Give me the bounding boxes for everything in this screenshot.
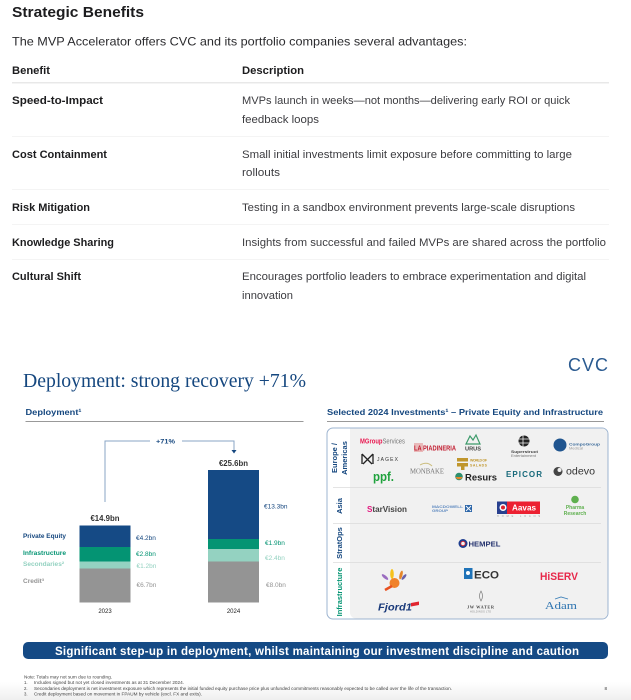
logo: La Piadineria (414, 443, 456, 452)
heading: deployment: Deployment¹ (26, 407, 82, 417)
logo: Pharma Research (564, 496, 586, 517)
logo: Superstruct Entertainment: Entertainment (511, 454, 536, 458)
row: cost containment (12, 149, 572, 179)
logo: Hempel: HEMPEL (468, 540, 501, 548)
row: cost containment: Cost Containment (12, 149, 107, 161)
logo: Pharma Research: Research (564, 511, 586, 517)
footnotes: 2. (24, 686, 28, 691)
logo: CVC: CVC (568, 355, 608, 375)
logo: Superstruct Entertainment (511, 436, 539, 458)
row: cultural shift: innovation (242, 290, 293, 302)
logo: PPF: ppf. (373, 469, 394, 484)
logo: Aavas: Aavas (512, 504, 537, 512)
row: cost containment: rollouts (242, 167, 281, 179)
logo: Monbake (410, 463, 444, 476)
value labels: €8.0bn (266, 582, 286, 589)
banner: key message (23, 642, 608, 659)
logo: CompoGroup Medical: Medical (569, 446, 583, 450)
legend labels: Infrastructure (23, 551, 67, 557)
value labels: €1.2bn (136, 563, 157, 570)
logo: Resurs: Resurs (465, 472, 497, 482)
intro text: The MVP Accelerator offers CVC and its portfolio companies several advantages: (12, 34, 467, 48)
logo: World of Salads (457, 458, 488, 470)
logo: World of Salads: WORLD OF (470, 458, 488, 462)
value labels: €2.4bn (265, 555, 285, 562)
logo: JW Water: HOLDINGS LTD (470, 610, 491, 614)
row: risk mitigation: Testing in a sandbox environment prevents large-scale disruptions (242, 202, 576, 214)
legend labels: Secondaries² (23, 561, 64, 568)
logo: flower (381, 569, 407, 590)
bar: 2023: 2023 (98, 609, 112, 615)
heading: strategic benefits: Strategic Benefits (12, 4, 144, 21)
banner: key message: Significant step-up in deployment, whilst maintaining our investment discipline and caution (55, 646, 579, 658)
footnotes: 3. (24, 692, 28, 696)
logo: Jagex: JAGEX (377, 457, 399, 463)
value labels: €13.3bn (264, 504, 288, 510)
chart: deployment stacked bars (23, 438, 288, 615)
logo: Pharma Research: Pharma (566, 505, 584, 511)
row: cultural shift (12, 271, 586, 302)
row: cost containment: Small initial investments limit exposure before committing to large (242, 149, 572, 161)
bar: 2024: 2024 (227, 609, 241, 615)
region label: StratOps: StratOps (335, 527, 344, 559)
row: knowledge sharing (12, 237, 606, 249)
footnotes: Includes signed but not yet closed investments as at 31 December 2024. (34, 680, 184, 685)
logo: JW Water (467, 591, 495, 614)
heading: selected 2024 investments: Selected 2024 Investments¹ – Private Equity and Infrastructure (327, 407, 603, 417)
bar: 2024 (208, 459, 259, 615)
row: speed-to-impact: feedback loops (242, 114, 320, 126)
row: cultural shift: Cultural Shift (12, 271, 81, 283)
row: risk mitigation: Risk Mitigation (12, 202, 90, 214)
logo: URUS (465, 435, 481, 452)
footnotes: Note: Totals may not sum due to rounding. (24, 674, 112, 680)
bar: 2023: €14.9bn (90, 514, 120, 523)
value labels: €6.7bn (136, 582, 157, 589)
value labels: €1.9bn (265, 540, 285, 547)
page number: 8 (604, 686, 608, 691)
region label: Infrastructure: Infrastructure (335, 568, 344, 616)
row: speed-to-impact (12, 95, 571, 126)
logo: Jagex (362, 454, 399, 464)
footnotes: Secondaries deployment is net investment exposure which represents the initial funded equity purchase price plus unfunded commitments reasonably expected to be called over the life of the transaction. (34, 686, 452, 691)
row: knowledge sharing: Knowledge Sharing (12, 237, 114, 249)
value labels: €2.8bn (136, 551, 156, 558)
table header (12, 65, 609, 84)
logo: Fjord1: Fjord1 (378, 602, 412, 614)
legend labels: Credit³ (23, 578, 44, 585)
slide title: Deployment: strong recovery +71% (23, 371, 306, 392)
logo: Epicor: EPICOR (506, 470, 542, 479)
region label: Europe /: Europe / (330, 442, 339, 473)
row: knowledge sharing: Insights from successful and failed MVPs are shared across the portfolio (242, 237, 606, 249)
logo: Aavas (497, 502, 540, 518)
table: benefits (12, 65, 609, 302)
logo: Macdowell Group: GROUP (432, 509, 449, 513)
region label: Americas: Americas (340, 441, 349, 475)
logo: Adam (545, 597, 578, 612)
logo: HiSERV: HiSERV (540, 571, 579, 583)
logo: Aavas: HOME LOANS (497, 515, 540, 518)
bar: 2023 (80, 514, 130, 615)
logo: Odevo: odevo (566, 466, 595, 478)
logo: CompoGroup Medical (554, 438, 601, 452)
logo: Monbake: MONBAKE (410, 468, 444, 476)
table header: Description (242, 65, 304, 77)
row: risk mitigation (12, 202, 576, 214)
panel: investments logos (327, 428, 608, 619)
row: cultural shift: Encourages portfolio leaders to embrace experimentation and digital (242, 271, 586, 283)
logo: MGroup Services: MGroupServices (360, 438, 405, 446)
row: speed-to-impact: Speed-to-Impact (12, 95, 103, 107)
arrow: +71% growth: +71% (156, 438, 175, 446)
logo: Superstruct Entertainment: Superstruct (511, 449, 539, 454)
footnotes: 1. (24, 680, 28, 685)
logo: JW Water: JW WATER (467, 604, 495, 610)
region label: Asia: Asia (335, 497, 344, 514)
logo: La Piadineria: LA PIADINERIA (414, 446, 456, 452)
logo: URUS: URUS (465, 446, 481, 452)
value labels: €4.2bn (136, 535, 156, 542)
logo: Adam: Adam (545, 600, 578, 612)
footnotes: Credit deployment based on movement in FPAUM by vehicle (excl. FX and exits). (34, 692, 202, 696)
arrow: +71% growth (105, 438, 236, 502)
logo: ECO: ECO (474, 570, 499, 582)
table header: Benefit (12, 65, 50, 77)
logo: CompoGroup Medical: CompoGroup (569, 442, 601, 446)
logo: Macdowell Group (432, 505, 472, 513)
logo: Hempel (458, 539, 501, 548)
logo: StarVision: StarVision (367, 505, 407, 514)
logo: Odevo (554, 466, 595, 478)
row: speed-to-impact: MVPs launch in weeks—not months—delivering early ROI or quick (242, 95, 571, 107)
footnotes (24, 674, 452, 696)
value labels (136, 504, 288, 589)
logo: Macdowell Group: MACDOWELL (432, 505, 464, 509)
logo: ECO (464, 568, 499, 582)
logo: World of Salads: SALADS (470, 464, 488, 468)
legend labels (23, 534, 67, 585)
legend labels: Private Equity (23, 534, 67, 540)
bar: 2024: €25.6bn (219, 459, 248, 468)
